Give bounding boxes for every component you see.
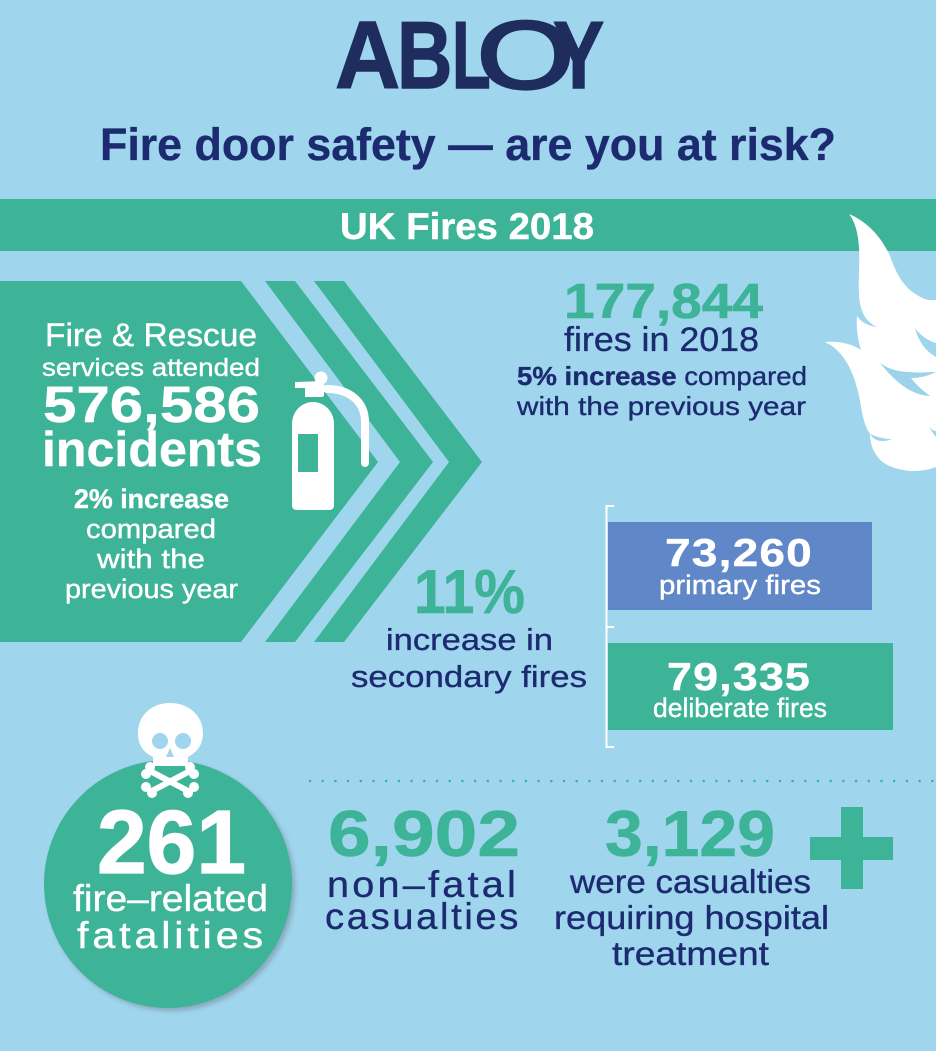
text: Fire and Rescue: Fire & Rescue <box>45 317 257 353</box>
logo: ABLOY: Y <box>553 2 604 109</box>
chevron: main arrow <box>0 281 378 642</box>
bar: primary fires <box>608 522 872 610</box>
stat block: 177,844 fires: with the previous year <box>516 391 806 421</box>
chevron: second stripe <box>265 281 433 642</box>
stat: 576,586: 576,586 <box>43 376 260 433</box>
stat block: 3,129 hospital: were casualties <box>569 863 811 900</box>
stat block: 177,844 fires: 5% increase compared <box>517 361 807 391</box>
stat block: 177,844 fires <box>516 275 807 421</box>
stat block: 6,902 casualties <box>325 797 521 937</box>
text: with the: with the <box>96 544 205 574</box>
fatalities badge <box>44 703 295 1011</box>
stat block: 177,844 fires: 177,844 <box>564 275 763 329</box>
stat block: 6,902 casualties: non–fatal <box>327 864 519 905</box>
text: 2% increase: 2% increase <box>74 484 229 514</box>
bar: deliberate fires: deliberate fires <box>653 693 827 723</box>
stat block: 3,129 hospital <box>554 797 829 972</box>
banner: UK Fires 2018 <box>0 199 936 251</box>
logo: ABLOY: A <box>335 1 400 109</box>
logo: ABLOY: L <box>452 2 491 109</box>
bar: deliberate fires <box>608 643 893 730</box>
stat block: 3,129 hospital: treatment <box>612 935 769 972</box>
bar: primary fires: 73,260 <box>665 532 813 575</box>
stat block: 6,902 casualties: casualties <box>325 896 521 937</box>
stat block: 11% secondary fires <box>351 558 587 694</box>
banner: UK Fires 2018: UK Fires 2018 <box>340 206 594 247</box>
icon: plus <box>810 807 893 889</box>
text: fire-related: fire–related <box>73 878 268 919</box>
logo: ABLOY: B <box>397 2 452 109</box>
stat block: 11% secondary fires: increase in <box>386 622 553 657</box>
chevron: third stripe <box>314 281 482 642</box>
stat block: 177,844 fires: fires in 2018 <box>564 321 759 359</box>
stat block: 3,129 hospital: 3,129 <box>605 797 775 870</box>
text: compared: compared <box>86 514 216 544</box>
bar: primary fires: primary fires <box>659 570 821 600</box>
chevron panel: Fire and Rescue incidents <box>0 281 482 642</box>
bracket <box>606 506 614 747</box>
icon: fire extinguisher <box>292 372 365 510</box>
stat block: 3,129 hospital: requiring hospital <box>554 899 829 936</box>
stat block: 11% secondary fires: 11% <box>414 558 525 627</box>
logo: ABLOY: O <box>477 1 574 109</box>
bar: deliberate fires: 79,335 <box>667 656 811 699</box>
stat block: 11% secondary fires: secondary fires <box>351 659 587 694</box>
icon: skull and crossbones <box>138 703 203 798</box>
icon: white flames <box>825 214 936 471</box>
stat: 261: 261 <box>97 793 246 893</box>
stat block: 6,902 casualties: 6,902 <box>328 797 520 870</box>
title: Fire door safety — are you at risk? <box>100 119 836 170</box>
text: fatalities: fatalities <box>77 915 267 956</box>
text: previous year: previous year <box>65 574 238 604</box>
stat: incidents: incidents <box>42 423 262 477</box>
logo: ABLOY <box>335 1 604 109</box>
text: services attended: services attended <box>42 354 260 382</box>
